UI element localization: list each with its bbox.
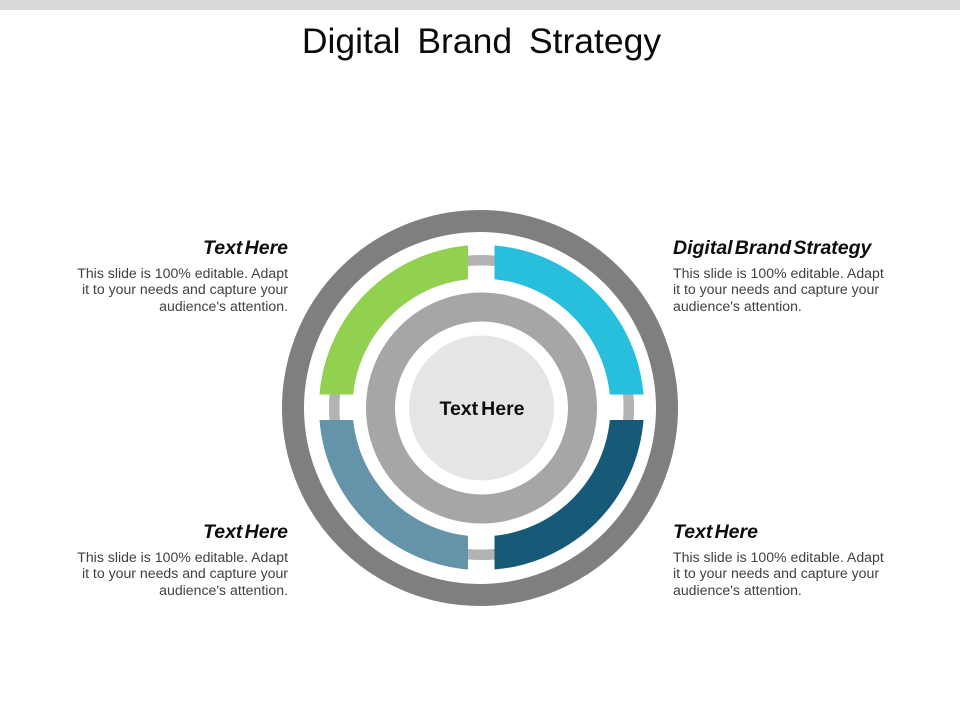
outer ring (293, 221, 667, 595)
text block: top right: audience's attention. (673, 298, 802, 314)
text block: bottom left: it to your needs and capture your (82, 565, 288, 581)
text block: top left: This slide is 100% editable. Adapt (77, 265, 288, 281)
text block: top left: it to your needs and capture your (82, 281, 288, 297)
segment: green (320, 246, 468, 394)
text block: top left: Text Here (203, 237, 288, 259)
text block: top right (673, 237, 884, 314)
white gap behind segments (352, 278, 610, 536)
top bar (0, 0, 960, 10)
center label: Text Here (439, 398, 525, 420)
title: Digital Brand Strategy (302, 21, 661, 61)
text block: top left (77, 237, 288, 314)
segment: dark blue (494, 420, 644, 570)
text block: bottom right: it to your needs and capture your (673, 565, 879, 581)
center circle (409, 336, 554, 480)
inner ring (380, 307, 582, 509)
text block: bottom right: audience's attention. (673, 582, 802, 598)
text block: top left: audience's attention. (159, 298, 288, 314)
segment: slate blue (320, 420, 468, 570)
text block: bottom right (673, 521, 884, 598)
text block: bottom left (77, 521, 288, 598)
text block: bottom left: This slide is 100% editable. Adapt (77, 549, 288, 565)
segment: cyan (494, 246, 644, 394)
text block: top right: Digital Brand Strategy (673, 237, 871, 259)
text block: bottom left: Text Here (203, 521, 288, 543)
text block: bottom right: This slide is 100% editable. Adapt (673, 549, 884, 565)
connector ring (334, 260, 629, 555)
text block: top right: it to your needs and capture your (673, 281, 879, 297)
text block: bottom right: Text Here (673, 521, 758, 543)
text block: top right: This slide is 100% editable. Adapt (673, 265, 884, 281)
text block: bottom left: audience's attention. (159, 582, 288, 598)
